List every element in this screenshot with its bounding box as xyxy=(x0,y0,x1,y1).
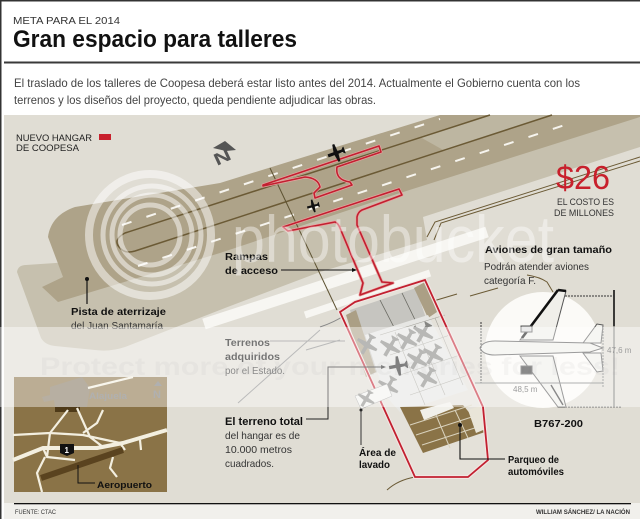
footer area xyxy=(4,503,640,519)
label: rampas de acceso xyxy=(225,251,357,277)
kicker: META PARA EL 2014 xyxy=(13,15,120,27)
icon: north arrow xyxy=(211,141,236,170)
inset location map xyxy=(13,377,167,492)
label: pista de aterrizaje xyxy=(71,277,166,332)
label: parqueo de automóviles xyxy=(458,423,564,478)
label: área de lavado: lavado xyxy=(359,460,390,471)
parking lot xyxy=(400,405,485,453)
label: aviones de gran tamaño: Aviones de gran tamaño xyxy=(485,244,612,256)
dimension: 47,6 m: 47,6 m xyxy=(607,346,632,355)
Aeropuerto callout xyxy=(78,465,152,491)
label: área de lavado: Área de xyxy=(359,446,396,459)
road and thin lines xyxy=(238,157,640,490)
label: terrenos adquiridos: Terrenos xyxy=(225,337,270,349)
cost callout xyxy=(554,159,614,219)
label: parqueo de automóviles: automóviles xyxy=(508,467,564,478)
intro text: El traslado de los talleres de Coopesa deberá estar listo antes del 2014. Actualmente el Gobierno cuenta con los xyxy=(14,76,580,90)
label: rampas de acceso: de acceso xyxy=(225,265,278,277)
legend: nuevo hangar: DE COOPESA xyxy=(16,143,80,154)
new hangar plot xyxy=(340,280,488,477)
legend: nuevo hangar xyxy=(16,133,111,154)
cost callout: EL COSTO ES xyxy=(557,197,614,208)
dimension lines xyxy=(475,290,622,407)
red ramps: upper taxiway xyxy=(263,146,381,198)
Alajuela area xyxy=(42,377,90,407)
label: rampas de acceso: Rampas xyxy=(225,251,268,263)
label: pista de aterrizaje: Pista de aterrizaje xyxy=(71,306,166,318)
label: terrenos adquiridos: por el Estado. xyxy=(225,366,285,377)
label: área de lavado xyxy=(359,408,396,471)
road shield xyxy=(60,444,74,456)
label: terreno total: El terreno total xyxy=(225,416,303,428)
Alajuela label: Alajuela xyxy=(89,391,128,401)
legend: nuevo hangar: NUEVO HANGAR xyxy=(16,133,92,144)
aircraft B767 xyxy=(480,290,603,407)
label: terreno total xyxy=(225,365,386,470)
label: terrenos adquiridos: adquiridos xyxy=(225,351,280,363)
label: aviones de gran tamaño xyxy=(484,244,612,287)
dark plane xyxy=(387,355,409,377)
road shield: 1 xyxy=(64,446,70,455)
label: parqueo de automóviles: Parqueo de xyxy=(508,455,559,466)
runways xyxy=(42,115,640,302)
aircraft circle xyxy=(485,292,601,408)
label: B767-200: B767-200 xyxy=(534,418,583,430)
parked planes xyxy=(352,318,448,401)
panel: airport map background xyxy=(4,115,640,503)
red ramps: lower access ramp xyxy=(283,189,402,295)
watermark word: photobucket xyxy=(232,202,554,276)
source: FUENTE: CTAC xyxy=(15,509,56,516)
label: terrenos adquiridos xyxy=(225,337,285,377)
wash area xyxy=(354,384,392,411)
label: terreno total: cuadrados. xyxy=(225,458,274,470)
watermark tagline: Protect more of your memories for less! xyxy=(40,353,620,381)
label: terreno total: 10.000 metros xyxy=(225,444,292,456)
watermark band xyxy=(0,327,640,407)
label: aviones de gran tamaño: categoría F. xyxy=(484,275,536,287)
dimension: 48,5 m: 48,5 m xyxy=(513,385,538,394)
label: aviones de gran tamaño: Podrán atender aviones xyxy=(484,261,589,273)
intro text xyxy=(14,76,580,107)
title: Gran espacio para talleres xyxy=(13,26,297,53)
watermark swirl xyxy=(89,174,211,296)
plot outline xyxy=(340,280,488,477)
inset north arrow: N xyxy=(153,389,161,401)
airport lobe xyxy=(17,117,640,351)
apron xyxy=(365,315,468,412)
cost callout: $26 xyxy=(556,159,610,196)
icon: north arrow: N xyxy=(211,145,234,170)
credit: WILLIAM SÁNCHEZ/ LA NACIÓN xyxy=(536,507,630,516)
airport runway xyxy=(41,450,123,478)
Aeropuerto callout: Aeropuerto xyxy=(97,480,152,491)
cost callout: DE MILLONES xyxy=(554,208,614,219)
runway lines xyxy=(117,115,552,252)
label: pista de aterrizaje: del Juan Santamaría xyxy=(71,321,163,332)
intro text: terrenos y los diseños del proyecto, queda pendiente adjudicar las obras. xyxy=(14,93,376,107)
roads xyxy=(13,377,167,492)
inset north arrow xyxy=(153,381,162,401)
white strips xyxy=(204,232,487,324)
top gray building zone xyxy=(350,288,437,375)
small planes on runway xyxy=(306,141,348,214)
label: terreno total: del hangar es de xyxy=(225,430,300,442)
